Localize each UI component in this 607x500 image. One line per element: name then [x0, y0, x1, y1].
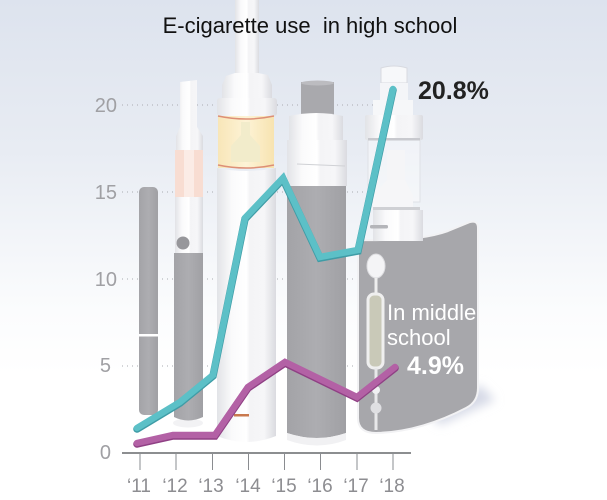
y axis labels: 10: [95, 269, 117, 291]
y axis labels: 0: [100, 442, 111, 464]
x axis year labels: ‘15: [271, 476, 297, 497]
y axis labels: 20: [95, 95, 117, 117]
y axis labels: 5: [100, 355, 111, 377]
device buttons and window: [367, 254, 385, 430]
icon: cigarette-style device: [139, 187, 158, 415]
x axis year labels: ‘11: [127, 476, 151, 497]
x axis year labels: ‘13: [198, 476, 224, 497]
icon: box mod with clear tank: [358, 66, 495, 433]
x axis year labels: ‘16: [307, 476, 333, 497]
x axis year labels: ‘14: [235, 476, 261, 497]
x axis year labels: ‘18: [379, 476, 405, 497]
icon: box tube device: [287, 80, 347, 446]
title: E-cigarette use in high school: [163, 13, 457, 38]
label: in middle school: school: [387, 325, 451, 350]
y axis labels: 15: [95, 182, 117, 204]
icon: large white pen device: [217, 0, 277, 442]
callout: 20.8%: 20.8%: [418, 77, 489, 105]
x axis year labels: ‘17: [343, 476, 369, 497]
y axis labels: [95, 95, 117, 464]
icon: slim pen device: [173, 80, 203, 428]
x axis year labels: [127, 476, 405, 497]
label: in middle school: In middle: [387, 300, 476, 325]
callout: 4.9%: 4.9%: [407, 352, 464, 380]
gridlines: [122, 105, 400, 366]
line: middle school: [137, 362, 395, 444]
x axis year labels: ‘12: [162, 476, 188, 497]
axis with tick marks: [122, 453, 411, 470]
line: high school: [137, 89, 393, 429]
